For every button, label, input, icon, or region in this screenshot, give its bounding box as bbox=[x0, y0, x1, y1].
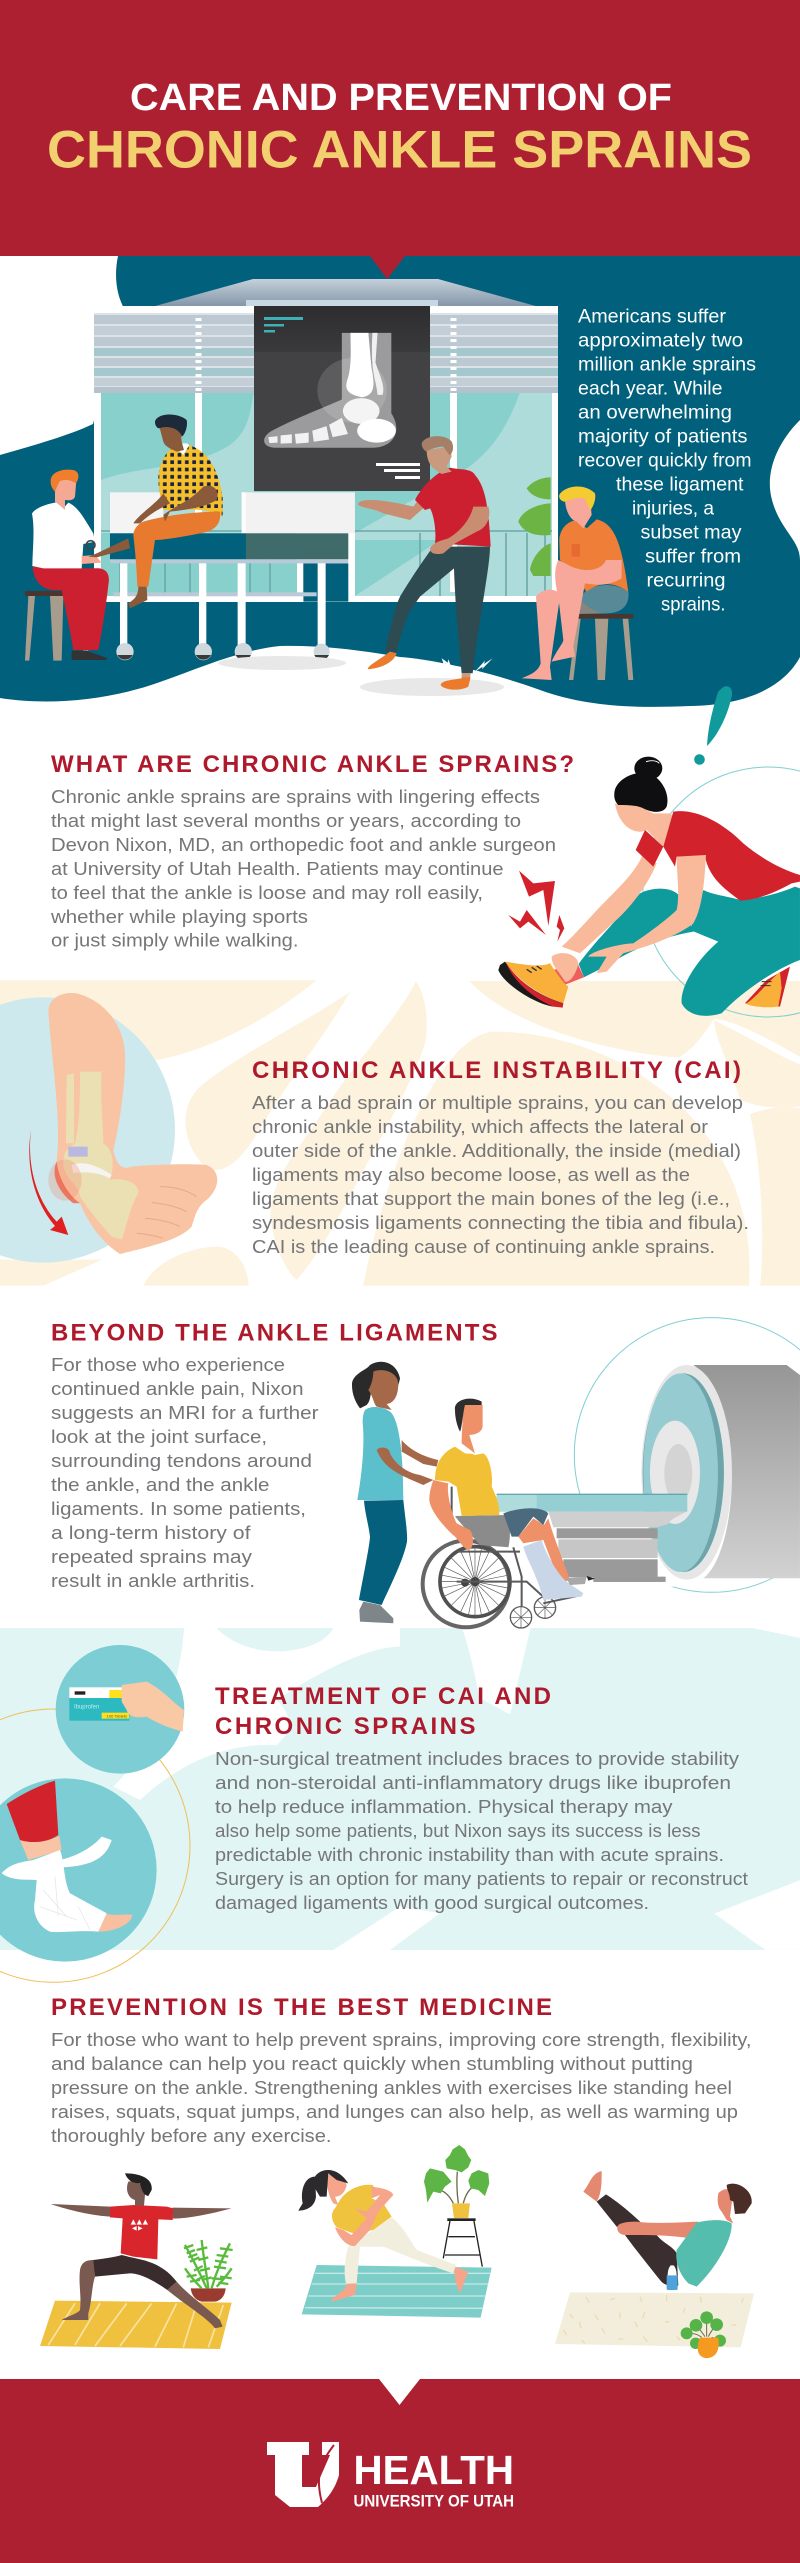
window blinds bbox=[94, 313, 558, 393]
text block: beyond the ankle ligaments: For those who experience bbox=[51, 1354, 285, 1375]
window roof bbox=[148, 279, 543, 308]
text block: chronic ankle instability: syndesmosis ligaments connecting the tibia and fibula). bbox=[252, 1212, 749, 1233]
text block: beyond the ankle ligaments: surrounding tendons around bbox=[51, 1450, 312, 1471]
icon: block U with DNA strand bbox=[267, 2442, 339, 2507]
illustration: doctor on stool bbox=[25, 470, 109, 661]
header red band with notch bbox=[0, 0, 800, 279]
text block: beyond the ankle ligaments: continued ankle pain, Nixon bbox=[51, 1378, 304, 1399]
text block: what are chronic ankle sprains: to feel that the ankle is loose and may roll easily, bbox=[51, 882, 483, 903]
text block: intro: million ankle sprains bbox=[578, 354, 756, 376]
icon: exclamation mark bbox=[694, 686, 732, 765]
pill box in hand circle: Ibuprofen bbox=[74, 1705, 99, 1711]
text block: beyond the ankle ligaments: suggests an MRI for a further bbox=[51, 1402, 318, 1423]
footer red band with notch bbox=[0, 2379, 800, 2563]
text block: treatment: to help reduce inflammation. Physical therapy may bbox=[215, 1796, 673, 1817]
illustration: MRI machine and wheelchair scene bbox=[352, 1318, 800, 1628]
heading: prevention: PREVENTION IS THE BEST MEDICINE bbox=[51, 1994, 552, 2021]
potted plant on stool bbox=[424, 2145, 489, 2267]
text block: what are chronic ankle sprains: at University of Utah Health. Patients may continue bbox=[51, 858, 504, 879]
text block: treatment: damaged ligaments with good surgical outcomes. bbox=[215, 1892, 649, 1913]
illustration: examination bed bbox=[107, 492, 355, 660]
panel: treatment light teal background bbox=[0, 1627, 800, 1950]
illustration: clinic window bbox=[94, 279, 558, 602]
text block: treatment: also help some patients, but Nixon says its success is less bbox=[215, 1820, 700, 1841]
illustration: woman holding ankle bbox=[498, 757, 800, 1017]
text block: treatment: Non-surgical treatment includes braces to provide stability bbox=[215, 1748, 740, 1769]
x-ray foot bones bbox=[264, 333, 396, 448]
illustration: treatment circles bbox=[0, 1645, 190, 1982]
heading: treatment of CAI and chronic sprains bbox=[215, 1683, 551, 1740]
text block: chronic ankle instability: ligaments that support the main bones of the leg (i.e., bbox=[252, 1188, 730, 1209]
text block: intro: majority of patients bbox=[578, 426, 748, 448]
panel: chronic ankle instability cream background bbox=[0, 980, 800, 1286]
text block: chronic ankle instability: CAI is the leading cause of continuing ankle sprains. bbox=[252, 1236, 715, 1257]
text block: beyond the ankle ligaments: ligaments. In some patients, bbox=[51, 1498, 306, 1519]
text block: prevention bbox=[51, 2029, 752, 2146]
text block: chronic ankle instability: chronic ankle instability, which affects the lateral or bbox=[252, 1116, 708, 1137]
text block: chronic ankle instability bbox=[252, 1092, 749, 1257]
text block: intro: injuries, a bbox=[632, 498, 714, 520]
text block: intro: an overwhelming bbox=[578, 402, 732, 424]
illustration: foot anatomy in circle bbox=[0, 993, 217, 1263]
logo: University of Utah Health bbox=[267, 2442, 514, 2510]
text block: what are chronic ankle sprains: or just simply while walking. bbox=[51, 930, 298, 950]
text block: prevention: For those who want to help prevent sprains, improving core strength, flexibility, bbox=[51, 2029, 752, 2050]
text block: treatment: predictable with chronic instability than with acute sprains. bbox=[215, 1844, 724, 1865]
illustration: patient on bed bbox=[88, 415, 223, 608]
heading: treatment of CAI and chronic sprains: CHRONIC SPRAINS bbox=[215, 1713, 476, 1740]
text block: what are chronic ankle sprains: Devon Nixon, MD, an orthopedic foot and ankle surgeon bbox=[51, 834, 556, 855]
bandaged foot circle bbox=[0, 1778, 157, 1962]
text block: intro: these ligament bbox=[616, 474, 744, 496]
logo: University of Utah Health: UNIVERSITY OF UTAH bbox=[354, 2492, 514, 2510]
text block: beyond the ankle ligaments: the ankle, and the ankle bbox=[51, 1474, 270, 1495]
pill box in hand circle bbox=[56, 1645, 184, 1774]
MRI scanner bbox=[497, 1365, 800, 1587]
text block: prevention: and balance can help you react quickly when stumbling without putting bbox=[51, 2053, 693, 2074]
text block: beyond the ankle ligaments bbox=[51, 1354, 318, 1591]
text block: treatment: Surgery is an option for many patients to repair or reconstruct bbox=[215, 1868, 748, 1889]
illustration: seated man on stool bbox=[522, 486, 633, 680]
text block: beyond the ankle ligaments: repeated sprains may bbox=[51, 1546, 253, 1567]
title: CHRONIC ANKLE SPRAINS bbox=[47, 120, 752, 180]
patient in wheelchair bbox=[429, 1399, 595, 1600]
heading: what are chronic ankle sprains: WHAT ARE CHRONIC ANKLE SPRAINS? bbox=[51, 751, 574, 778]
illustration: warrior yoga pose on yellow mat bbox=[40, 2173, 233, 2349]
text block: what are chronic ankle sprains: that might last several months or years, according to bbox=[51, 810, 521, 831]
text block: beyond the ankle ligaments: a long-term history of bbox=[51, 1522, 251, 1543]
illustration: side lunge yoga pose on teal mat bbox=[298, 2145, 492, 2318]
text block: intro: sprains. bbox=[661, 594, 726, 616]
text block: intro: subset may bbox=[640, 522, 742, 544]
heading: beyond the ankle ligaments: BEYOND THE ANKLE LIGAMENTS bbox=[51, 1320, 498, 1346]
nurse bbox=[352, 1362, 438, 1623]
text block: treatment: and non-steroidal anti-inflammatory drugs like ibuprofen bbox=[215, 1772, 731, 1793]
panel: header banner bbox=[0, 0, 800, 279]
illustration: standing man with ankle pain bbox=[358, 436, 493, 690]
text block: intro: recurring bbox=[646, 570, 726, 592]
text block: beyond the ankle ligaments: result in ankle arthritis. bbox=[51, 1570, 255, 1591]
arrow: red roll direction bbox=[29, 1130, 68, 1235]
heading: treatment of CAI and chronic sprains: TREATMENT OF CAI AND bbox=[215, 1683, 551, 1710]
text block: intro: suffer from bbox=[645, 546, 741, 568]
heading: chronic ankle instability: CHRONIC ANKLE INSTABILITY (CAI) bbox=[252, 1057, 741, 1084]
pill box in hand circle: 100 Tablets bbox=[107, 1713, 127, 1718]
text block: chronic ankle instability: ligaments may also become loose, as well as the bbox=[252, 1164, 690, 1185]
text block: treatment bbox=[215, 1748, 748, 1913]
text block: intro: approximately two bbox=[578, 330, 743, 352]
text block: what are chronic ankle sprains bbox=[50, 786, 556, 950]
text block: prevention: raises, squats, squat jumps, and lunges can also help, as well as warming up bbox=[51, 2101, 738, 2122]
text block: what are chronic ankle sprains: Chronic ankle sprains are sprains with lingering effects bbox=[51, 786, 540, 807]
panel: hero teal blob background bbox=[0, 256, 800, 707]
text block: chronic ankle instability: After a bad sprain or multiple sprains, you can develop bbox=[252, 1092, 743, 1113]
text block: intro bbox=[578, 306, 756, 616]
text block: chronic ankle instability: outer side of the ankle. Additionally, the inside (medial) bbox=[252, 1140, 741, 1161]
floor shadows bbox=[218, 656, 504, 696]
text block: prevention: thoroughly before any exercise. bbox=[51, 2125, 332, 2146]
illustration: plant behind window bbox=[518, 477, 551, 576]
title: CARE AND PREVENTION OF bbox=[130, 77, 672, 119]
text block: intro: each year. While bbox=[578, 378, 722, 400]
illustration: boat yoga pose on cream mat bbox=[555, 2171, 754, 2358]
text block: what are chronic ankle sprains: whether while playing sports bbox=[50, 906, 308, 927]
text block: prevention: pressure on the ankle. Strengthening ankles with exercises like standing heel bbox=[51, 2077, 732, 2098]
panel: footer bbox=[0, 2379, 800, 2563]
wheelchair bbox=[423, 1487, 582, 1628]
illustration: x-ray board bbox=[246, 300, 438, 491]
text block: beyond the ankle ligaments: look at the joint surface, bbox=[51, 1426, 267, 1447]
text block: intro: recover quickly from bbox=[578, 450, 752, 472]
logo: University of Utah Health: HEALTH bbox=[354, 2447, 514, 2493]
text block: intro: Americans suffer bbox=[578, 306, 727, 328]
title bbox=[47, 77, 752, 180]
